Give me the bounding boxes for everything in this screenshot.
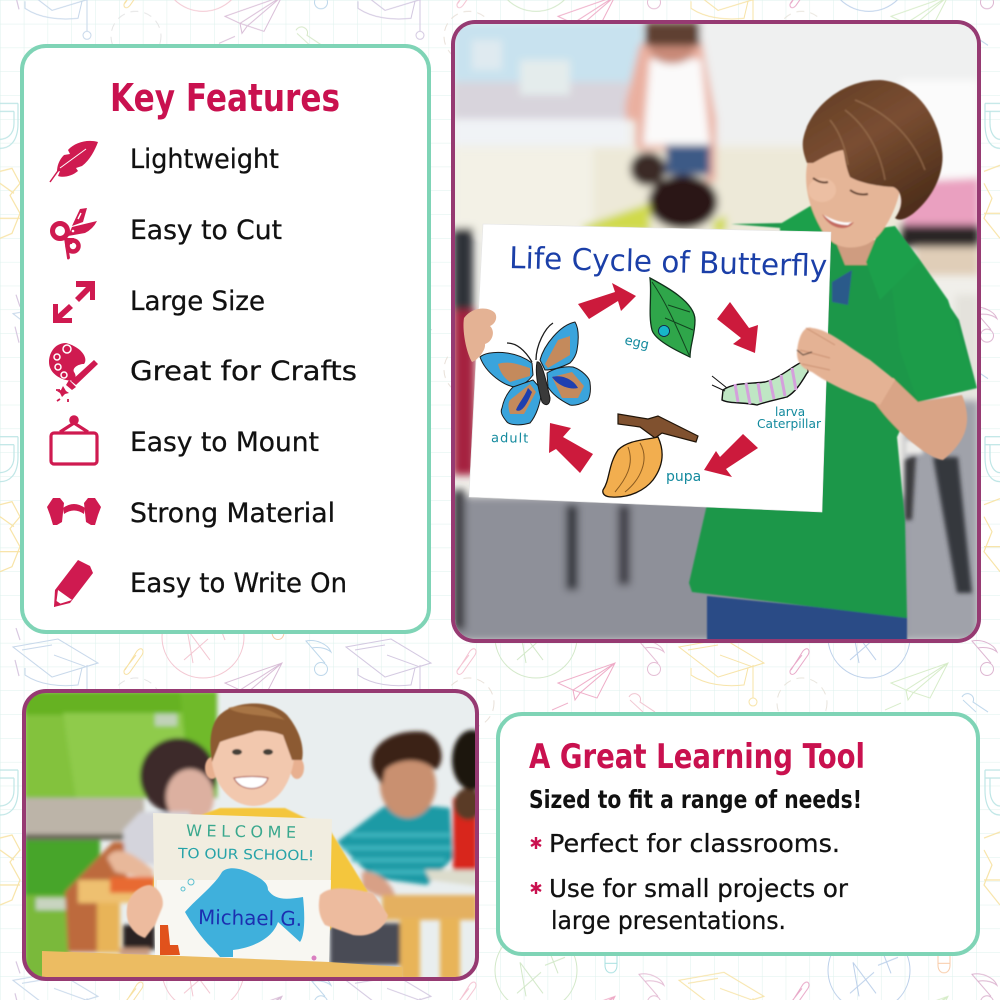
- heading: A Great Learning Tool: [529, 737, 865, 777]
- poster title: Life Cycle of Butterfly: [509, 241, 828, 284]
- bullet one: Perfect for classrooms.: [549, 829, 840, 858]
- feature: strong material: Strong Material: [130, 498, 335, 529]
- chrysalis on branch: [603, 414, 698, 497]
- bullet two: [531, 874, 849, 935]
- poster: life cycle of butterfly: Caterpillar: [757, 416, 822, 431]
- label: adult: adult: [491, 431, 529, 447]
- bullet two: Use for small projects or: [549, 874, 849, 903]
- icon: resize arrows: [53, 281, 95, 323]
- panel: classroom photo with butterfly poster: [451, 20, 981, 643]
- icon: feather: [50, 141, 98, 182]
- poster text: to our school: TO OUR SCHOOL!: [177, 846, 314, 864]
- subheading: Sized to fit a range of needs!: [529, 785, 862, 814]
- foreground desk: [42, 951, 402, 978]
- label: larva caterpillar: larva: [775, 405, 805, 419]
- poster text: michael g: Michael G.: [198, 905, 302, 931]
- boy: [689, 80, 977, 641]
- panel: smiling boy holding poster photo: [24, 691, 492, 980]
- fish shape: [185, 868, 304, 957]
- photo background: [24, 691, 492, 980]
- icon: scissors: [52, 208, 97, 260]
- boy with yellow shirt: [150, 703, 368, 930]
- photo frame: [24, 691, 477, 979]
- hand left of poster: [463, 309, 496, 362]
- feature: easy to mount: Easy to Mount: [130, 427, 319, 458]
- background chair: [905, 440, 972, 593]
- hands: [127, 885, 388, 938]
- photo background: [453, 22, 979, 641]
- icon: dumbbell: [47, 498, 101, 525]
- photo frame: [451, 20, 981, 643]
- label: egg: egg: [623, 333, 650, 353]
- bullet two: large presentations.: [551, 906, 786, 935]
- label: pupa: pupa: [666, 469, 701, 485]
- butterfly: [480, 322, 590, 425]
- welcome poster: [153, 813, 332, 962]
- caterpillar: [712, 363, 808, 405]
- heading: key features: Key Features: [110, 76, 340, 120]
- feature: large size: Large Size: [130, 286, 265, 317]
- poster text: welcome: WELCOME: [186, 821, 296, 842]
- icon: pencil: [54, 560, 93, 607]
- leaf with egg: [650, 278, 695, 357]
- poster: life cycle of butterfly: [463, 224, 895, 512]
- feature: lightweight: Lightweight: [130, 144, 279, 175]
- hand over poster: [797, 327, 895, 405]
- cycle arrows: [549, 283, 758, 477]
- panel: key features: [22, 46, 429, 632]
- feature: easy to cut: Easy to Cut: [130, 215, 282, 246]
- feature: great for crafts: Great for Crafts: [130, 356, 357, 387]
- feature: easy to write on: Easy to Write On: [130, 568, 347, 599]
- icon: palette and brush: [49, 343, 98, 402]
- panel: a great learning tool: [498, 714, 978, 954]
- icon: hanging frame: [51, 417, 97, 464]
